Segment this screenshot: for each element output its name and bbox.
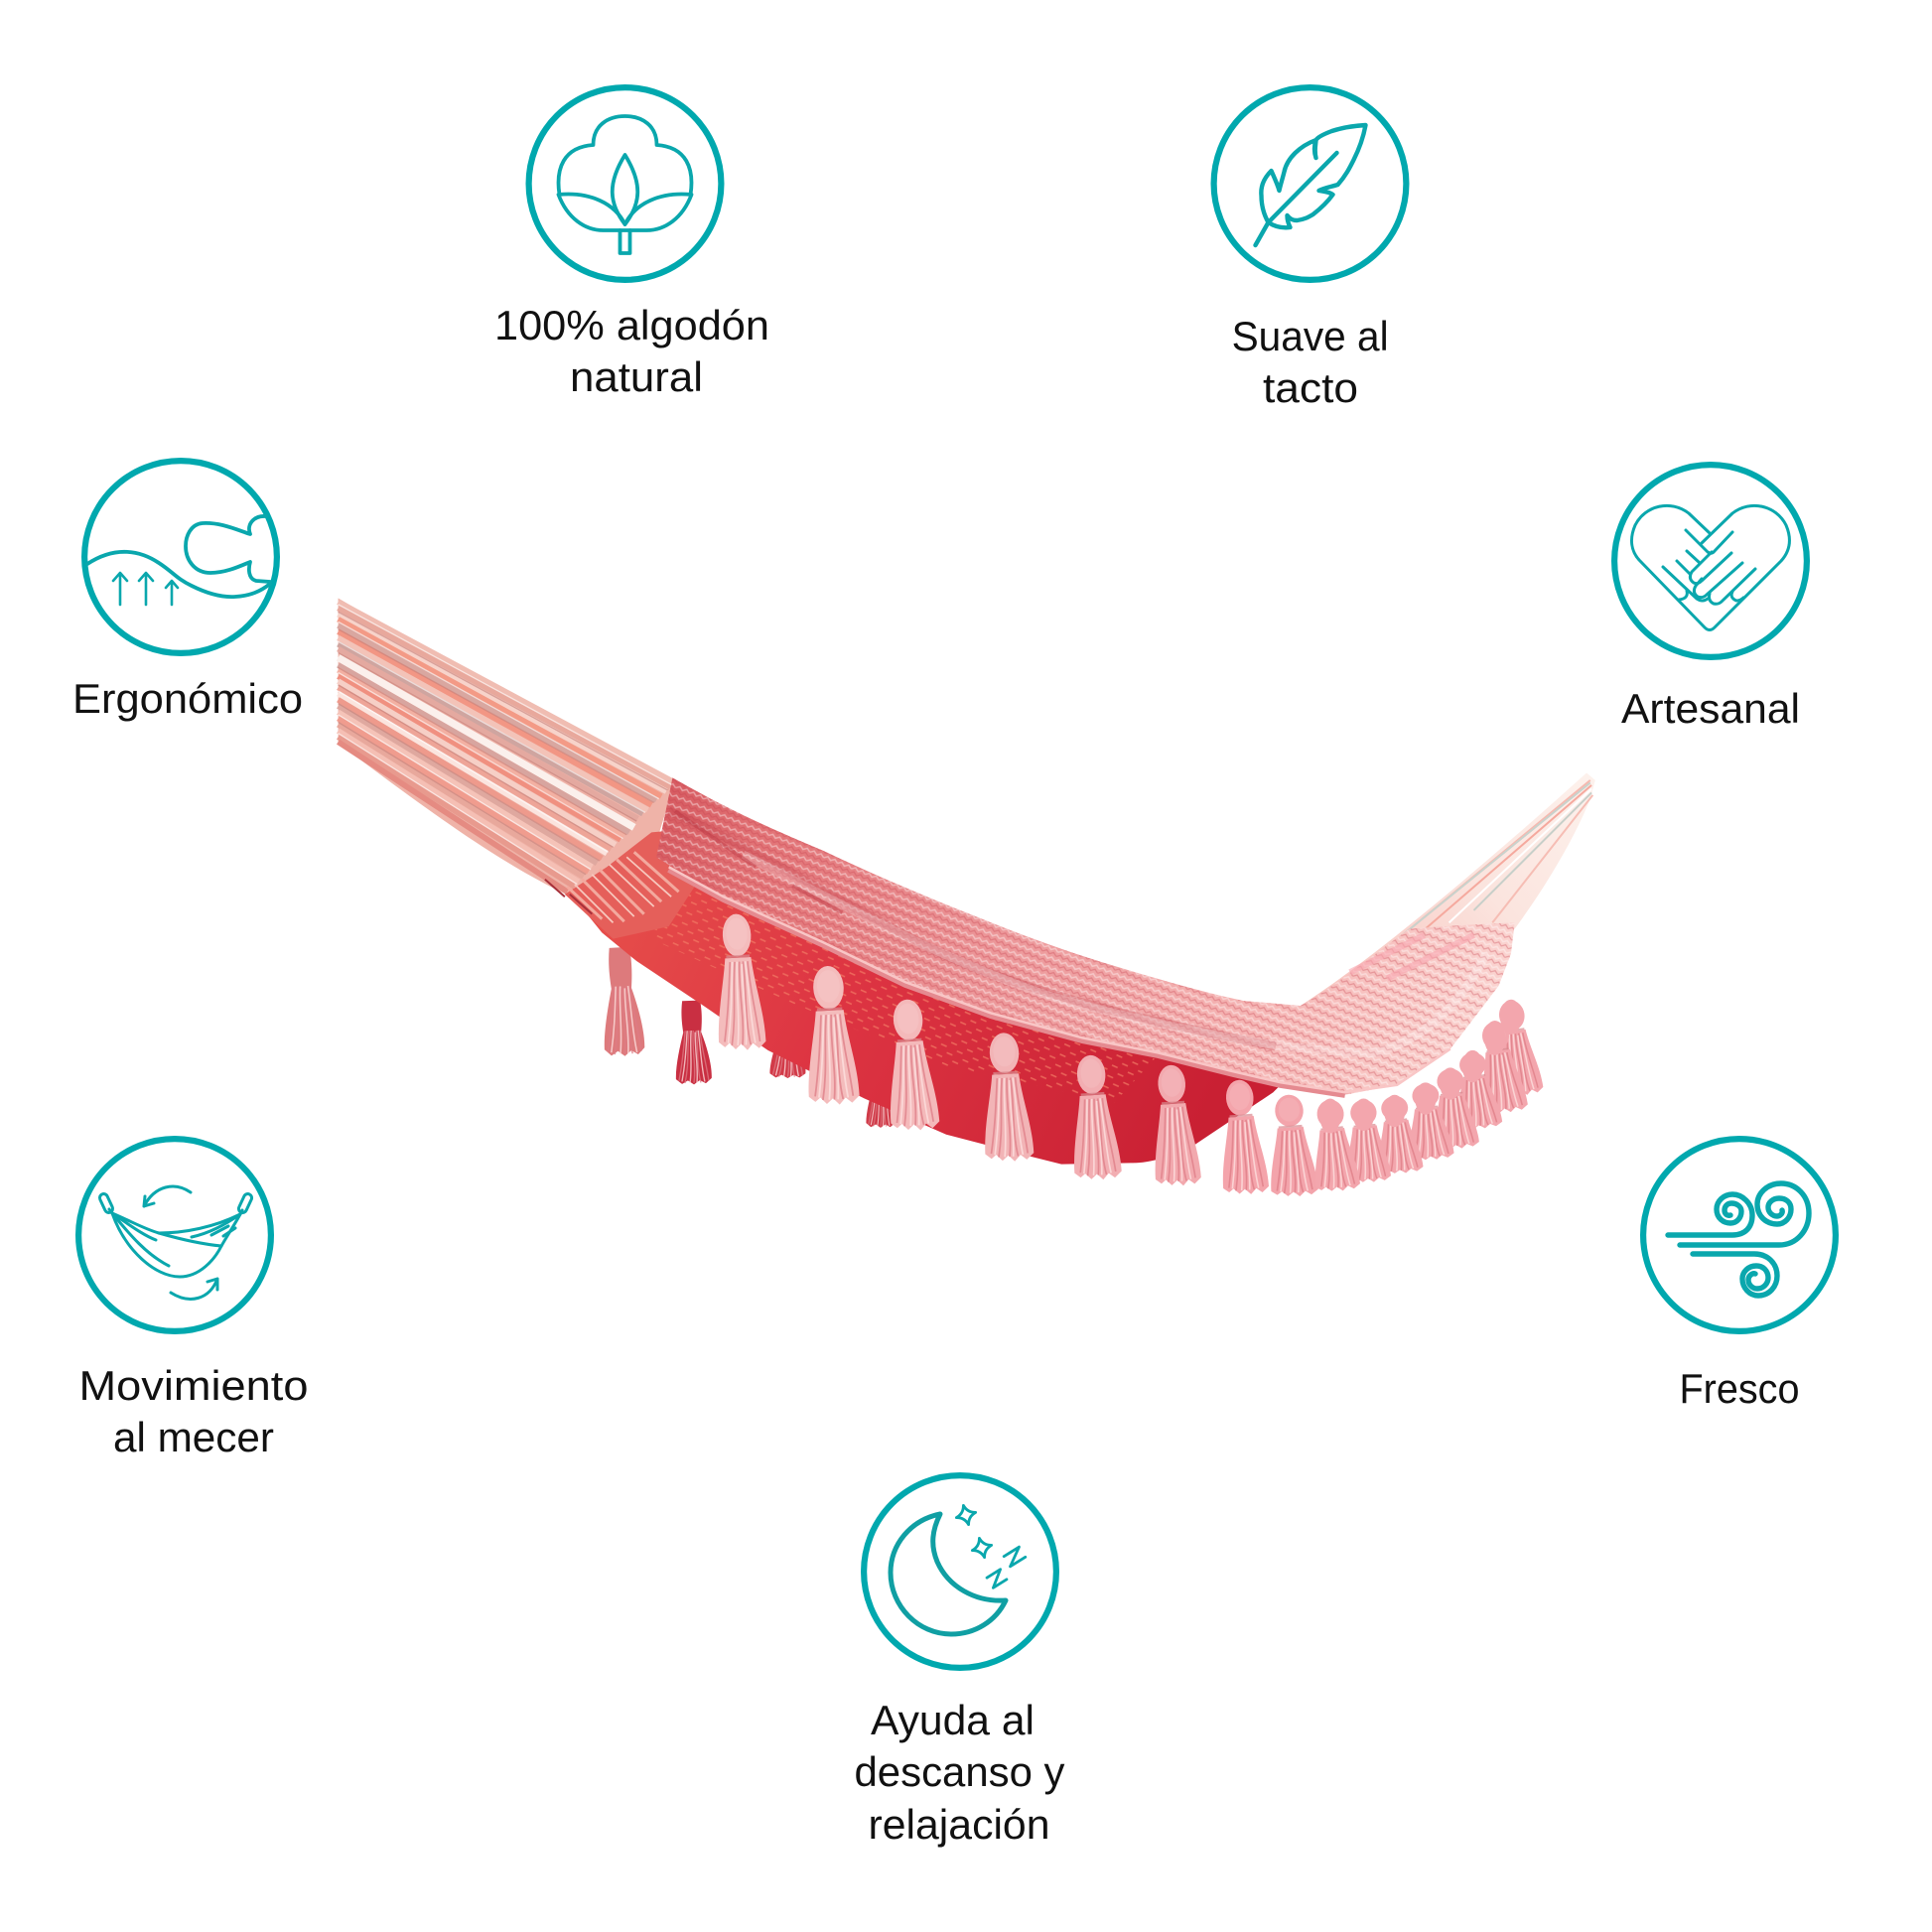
feature: Movimiento al mecer [78, 1139, 308, 1460]
icon: wind [1643, 1139, 1836, 1331]
strand to weave transition [545, 830, 696, 939]
label: Ayuda al descanso y relajación: relajación [868, 1801, 1050, 1848]
icon: feather [1214, 87, 1406, 280]
left suspension strands [339, 599, 675, 904]
label: Suave al tacto: Suave al [1232, 313, 1389, 359]
feature: Suave al tacto [1214, 87, 1406, 411]
label: 100% algodón natural [494, 302, 769, 400]
red hammock body [566, 860, 1281, 1165]
icon: cotton [529, 87, 721, 280]
feature: 100% algodón natural [494, 87, 769, 400]
hem rope [669, 867, 1450, 1095]
right arm strands [1301, 772, 1595, 1006]
pink tassels [712, 912, 1544, 1198]
label: Ergonómico: Ergonómico [72, 675, 303, 722]
label: Ayuda al descanso y relajación [854, 1697, 1064, 1848]
label: Ayuda al descanso y relajación: Ayuda al [871, 1697, 1035, 1743]
label: 100% algodón natural: 100% algodón [494, 302, 769, 348]
label: Movimiento al mecer [79, 1362, 308, 1460]
hanging red tassels behind body [600, 946, 896, 1128]
feature: Ayuda al descanso y relajación [854, 1475, 1064, 1848]
icon: ergonomic body [84, 461, 277, 653]
label: Suave al tacto: tacto [1263, 364, 1358, 411]
icon: moon and stars [864, 1475, 1056, 1668]
label: Ayuda al descanso y relajación: descanso y [854, 1748, 1064, 1795]
woven pink band [656, 777, 1515, 1095]
label: Movimiento al mecer: al mecer [113, 1414, 274, 1460]
label: Fresco: Fresco [1680, 1365, 1799, 1412]
feature: Ergonómico [72, 461, 303, 722]
icon: swinging hammock [78, 1139, 271, 1331]
feature: Artesanal [1614, 465, 1807, 732]
label: Movimiento al mecer: Movimiento [79, 1362, 308, 1409]
hammock illustration [339, 599, 1595, 1198]
label: Suave al tacto [1232, 313, 1389, 411]
label: Artesanal: Artesanal [1621, 685, 1800, 732]
icon: heart of hands [1614, 465, 1807, 657]
label: 100% algodón natural: natural [570, 353, 703, 400]
feature: Fresco [1643, 1139, 1836, 1412]
